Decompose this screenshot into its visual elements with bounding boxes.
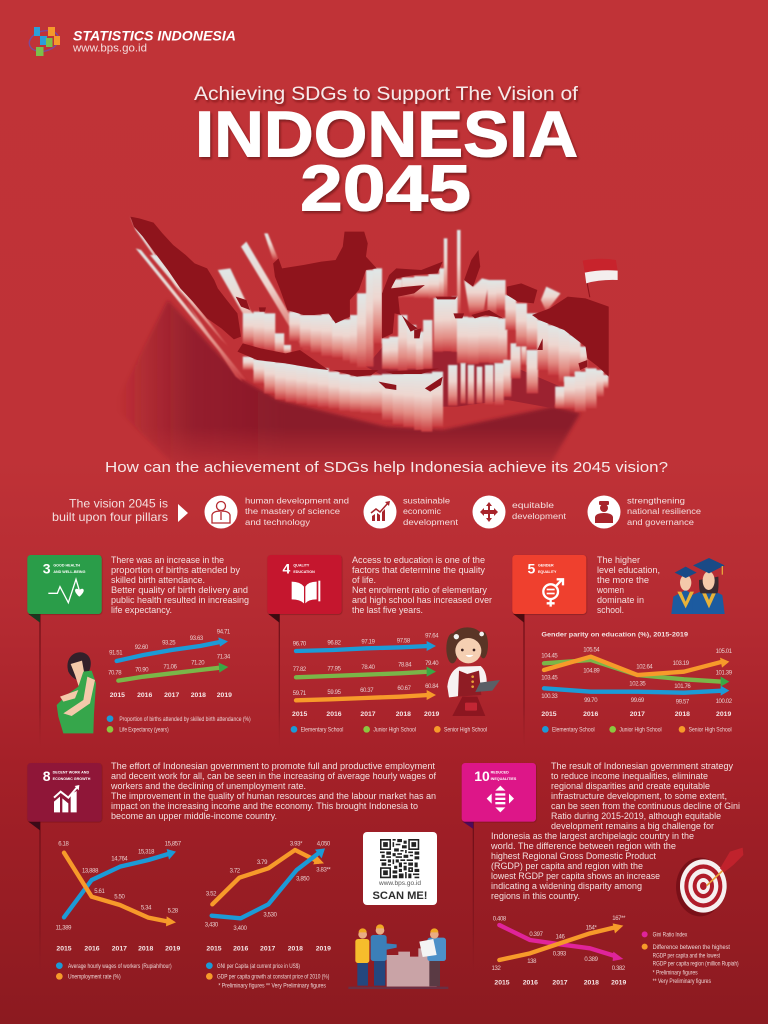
legend: wages [56,962,172,981]
SDG 8 text: become an upper middle-income country. [111,811,277,821]
line chart: wages and unemployment: 5.34 [141,905,152,911]
line chart: gender parity: 105.54 [583,648,600,654]
line chart: gender parity: 100.33 [541,694,558,700]
line chart: wages and unemployment: 5.28 [168,908,179,914]
pillars lead text: built upon four pillars [52,510,168,524]
icon: Indonesian flag [583,259,618,297]
line chart: GNI and GDP per capita: 3.72 [230,869,241,875]
QR code card: SCAN ME! [372,890,428,902]
pillar 1: and technology [245,517,311,527]
line chart: GNI and GDP per capita: 3,850 [296,877,310,883]
line chart: Gini and RGDP difference: 138 [527,959,537,965]
SDG 10 text: (RGDP) per capita and region with the [491,861,643,871]
line chart: wages and unemployment: 15,857 [165,841,182,847]
line chart: wages and unemployment: 6.18 [58,842,69,848]
legend: SDG 4: Junior High School [373,727,416,734]
line chart: enrolment ratio: 78.84 [398,663,412,669]
SDG 5 text: the more the [597,575,649,585]
line chart: GNI and GDP per capita: 2015 [206,946,222,953]
line chart: births and life expectancy: 2016 [137,692,152,699]
line chart: wages and unemployment: 2015 [56,946,72,953]
legend: GNI and GDP: GNI per Capita (at current price in US$) [217,963,300,970]
SDG 8 text: and decent work for all, can be seen in the increasing of average hourly wages of [111,771,436,781]
line chart: gender parity: 2016 [583,711,598,718]
line chart: gender parity: 99.70 [584,698,598,704]
line chart: GNI and GDP per capita: 2019 [316,946,331,953]
line chart: gender parity: 103.19 [673,661,690,667]
logo: Statistics Indonesia [27,27,61,56]
SDG 4 text: Access to education is one of the [352,555,485,565]
QR code card: www.bps.go.id [378,880,421,887]
SDG 10 text: regions in this country. [491,891,580,901]
line chart: Gini and RGDP difference: 0.408 [493,917,507,923]
agency name: www.bps.go.id [72,42,147,54]
QR code card [363,832,437,905]
SDG 5 text: dominate in [597,595,644,605]
legend: SDG 3: Life Expectancy (years) [119,727,169,734]
line chart: GNI and GDP per capita: 3.83** [316,868,331,874]
SDG 8 text: The effort of Indonesian government to promote full and productive employment [111,761,435,771]
SDG 4 card: EDUCATION [293,570,315,574]
legend: SDG 3: Proportion of births attended by skilled birth attendance (%) [119,716,251,723]
SDG 8 card: ECONOMIC GROWTH [53,777,91,781]
line chart: enrolment ratio: 77.95 [327,666,342,672]
SDG 4 text: of life. [352,575,376,585]
line chart: enrolment ratio: 2017 [360,711,376,718]
pillar 4: strengthening [627,496,685,506]
icon: school girl [446,627,500,716]
title: INDONESIA [195,98,578,170]
SDG 10 text: regional disparities and create equitable [551,781,710,791]
line chart: births and life expectancy: 2018 [191,692,206,699]
SDG 10 text: indicating a widening disparity among [491,881,642,891]
line chart: births and life expectancy: 2015 [110,692,125,699]
SDG 10 card: REDUCED [491,771,509,775]
legend: SDG 10: RGDP per capita and the lowest [653,952,720,959]
SDG 3 text: life expectancy. [111,605,172,615]
line chart: enrolment ratio: 2015 [292,711,307,718]
title [194,83,579,224]
line chart: wages and unemployment: 14,764 [111,857,128,863]
line chart: Gini and RGDP difference [492,916,626,987]
line chart: GNI and GDP per capita: 4,050 [317,842,331,848]
legend: SDG 10: RGDP per capita region (million Rupiah) [653,961,739,968]
SDG 5 text: The higher [597,555,640,565]
legend: SDG 10: Gini Ratio Index [653,932,688,939]
SDG 10 card: INEQUALITIES [491,777,517,781]
SDG 5 card: EQUALITY [538,570,557,574]
line chart: gender parity: 101.76 [674,684,691,690]
line chart: wages and unemployment [55,841,182,953]
SDG 10 text: to reduce income inequalities, eliminate [551,771,708,781]
pillar 1: human development and [245,496,349,506]
line chart: gender parity: 104.45 [541,653,558,659]
line chart: wages and unemployment: 2019 [165,946,180,953]
SDG 4 text: Net enrolment ratio of elementary [352,585,487,595]
pillar 2: economic [403,506,442,516]
line chart: Gini and RGDP difference: 167** [612,916,626,922]
legend: wages: Average hourly wages of workers (Rupiah/hour) [68,963,172,970]
SDG 10 text: can be seen from the continuous decline of Gini [551,801,740,811]
line chart: enrolment ratio: 96.70 [293,642,307,648]
SDG 8 text: The improvement in the quality of human resources and the labour market has an [111,791,436,801]
legend: GNI and GDP [206,962,329,990]
SDG 10 card: 10 [474,768,490,784]
line chart: gender parity: 104.89 [583,669,600,675]
line chart: enrolment ratio: 77.82 [293,667,307,673]
icon: target and dart [676,848,743,916]
SDG 3 text: There was an increase in the [111,555,224,565]
line chart: enrolment ratio: 2018 [396,711,411,718]
line chart: births and life expectancy: 71.20 [191,661,205,667]
pillar 4: and governance [627,517,694,527]
pillars lead text [52,496,168,524]
SDG 8 text [110,761,436,821]
legend: wages: Unemployment rate (%) [68,974,121,981]
line chart: Gini and RGDP difference: 146 [556,934,565,940]
SDG 4 text: the last five years. [352,605,423,615]
SDG 3 text: skilled birth attendance. [111,575,205,585]
legend: SDG 10: * Preliminary figures [653,969,698,976]
SDG 5 card: 5 [527,561,535,577]
line chart: enrolment ratio: 59.95 [327,690,342,696]
legend: SDG 4: Elementary School [301,727,344,734]
pillar 2: development [403,517,459,527]
SDG 8 card: DECENT WORK AND [53,771,89,775]
panel: SDG 3 health [27,555,251,747]
SDG 3 card: AND WELL-BEING [53,570,86,574]
legend: SDG 4 [291,726,487,734]
line chart: births and life expectancy: 94.71 [217,629,231,635]
SDG 3 text: Better quality of birth delivery and [111,585,248,595]
SDG 10 text: world. The difference between region with the [490,841,676,851]
SDG 10 text [490,761,740,901]
SDG 8 card: 8 [43,768,51,784]
line chart: births and life expectancy: 93.25 [162,641,176,647]
line chart: enrolment ratio: 2019 [424,711,439,718]
legend: SDG 5 [542,726,732,734]
line chart: gender parity: 2019 [716,711,731,718]
pillars lead text: The vision 2045 is [69,496,168,510]
SDG 10 text: infrastructure development, to some extent, [551,791,727,801]
line chart: wages and unemployment: 11,389 [55,926,72,932]
line chart: gender parity: 105.01 [716,649,733,655]
legend: GNI and GDP: * Preliminary figures ** Very Preliminary figures [218,983,327,990]
line chart: GNI and GDP per capita: 3.79 [257,860,268,866]
pillar 4: national resilience [627,506,701,516]
pillar 1: the mastery of science [245,506,340,516]
SDG 3 text: public health resulted in increasing [111,595,249,605]
legend: SDG 5: Senior High School [689,727,732,734]
line chart: Gini and RGDP difference: 0.389 [584,957,599,963]
line chart: Gini and RGDP difference: 2019 [611,980,626,987]
line chart: gender parity: 102.64 [636,665,653,671]
line chart: births and life expectancy [108,629,232,699]
SDG 5 card [512,555,586,747]
line chart: Gini and RGDP difference: 0.382 [612,966,626,972]
line chart: enrolment ratio: 60.84 [425,684,439,690]
line chart: births and life expectancy: 92.60 [135,645,149,651]
SDG 3 card: GOOD HEALTH [53,564,80,568]
legend: SDG 5: Elementary School [552,727,595,734]
line chart: births and life expectancy: 93.63 [190,636,204,642]
arrow [178,504,188,522]
line chart: gender parity: 101.39 [716,670,733,676]
pillar 2 [364,496,459,528]
line chart: gender parity: 102.35 [629,682,646,688]
line chart: gender parity: 103.45 [541,675,558,681]
line chart: GNI and GDP per capita: 3,530 [263,912,278,918]
line chart: births and life expectancy: 91.51 [109,651,123,657]
line chart: gender parity: 99.69 [631,698,645,704]
SDG 10 card [462,763,536,982]
line chart: enrolment ratio: 97.19 [361,639,376,645]
SDG 4 card: QUALITY [293,564,310,568]
panel: SDG 8 decent work [27,761,448,990]
pillar 2: sustainable [403,496,450,506]
SDG 8 text: workers and the declining of unemployment rate. [110,781,306,791]
line chart: enrolment ratio: 97.64 [425,633,439,639]
legend: SDG 3 [107,715,251,734]
legend: SDG 5: Junior High School [619,727,662,734]
line chart: Gini and RGDP difference: 2016 [523,980,538,987]
line chart: enrolment ratio: 79.40 [425,661,439,667]
agency name [72,28,236,54]
SDG 10 text: highest Regional Gross Domestic Product [491,851,656,861]
line chart: births and life expectancy: 2017 [164,692,179,699]
SDG 4 card: 4 [282,561,290,577]
line chart: GNI and GDP per capita: 3,400 [233,926,248,932]
line chart: Gini and RGDP difference: 0.393 [553,951,567,957]
line chart: Gini and RGDP difference: 2018 [584,980,599,987]
SDG 5 text [596,555,660,615]
line chart: wages and unemployment: 2017 [112,946,127,953]
agency name: STATISTICS INDONESIA [73,28,236,44]
line chart: wages and unemployment: 13,888 [82,869,99,875]
SDG 5 text: women [596,585,624,595]
line chart: Gini and RGDP difference: 154* [586,926,597,932]
SDG 3 card [27,555,102,747]
line chart: GNI and GDP per capita: 2017 [260,946,275,953]
line chart: births and life expectancy: 71.34 [217,654,231,660]
line chart: GNI and GDP per capita: 2016 [233,946,248,953]
map of Indonesia [114,217,618,483]
line chart: enrolment ratio: 2016 [326,711,342,718]
line chart: gender parity: 2015 [541,711,557,718]
icon: pregnant woman [57,652,96,733]
legend: SDG 10: Difference between the highest [653,944,730,951]
line chart: wages and unemployment: 5.61 [94,889,105,895]
SDG 5 card: GENDER [538,564,554,568]
line chart: enrolment ratio: 59.71 [293,691,307,697]
line chart: wages and unemployment: 2018 [138,946,153,953]
pillar 1 [204,496,349,528]
line chart: GNI and GDP per capita: 3,430 [205,922,219,928]
line chart: wages and unemployment: 2016 [84,946,100,953]
pillar 3: development [512,511,567,521]
SDG 8 card [27,763,102,982]
title: 2045 [300,152,471,224]
SDG 4 text: and high school has increased over [352,595,492,605]
SDG 8 text: impact on the increasing income and the economy. This brought Indonesia to [111,801,418,811]
SDG 10 text: Ratio during 2015-2019, although equitable [551,811,721,821]
SDG 3 text [111,555,249,615]
line chart: gender parity: 99.57 [676,700,690,706]
SDG 5 text: school. [597,605,624,615]
line chart: Gini and RGDP difference: 0.397 [529,932,544,938]
legend: SDG 10: ** Very Preliminary figures [653,978,711,985]
SDG 3 card: 3 [43,561,51,577]
title: Achieving SDGs to Support The Vision of [194,83,579,105]
SDG 10 text: lowest RGDP per capita shows an increase [491,871,660,881]
legend: GNI and GDP: GDP per capita growth at constant price of 2010 (%) [217,974,329,981]
line chart: GNI and GDP per capita [205,841,331,953]
SDG 5 text: level education, [597,565,660,575]
line chart: GNI and GDP per capita: 2018 [288,946,303,953]
line chart: gender parity: 2017 [630,711,645,718]
line chart: gender parity: 2018 [675,711,690,718]
SDG 4 card [267,555,342,747]
line chart: wages and unemployment: 15,318 [138,849,155,855]
line chart: wages and unemployment: 5.50 [114,895,125,901]
line chart: enrolment ratio: 97.58 [397,639,411,645]
line chart: gender parity: 100.02 [716,699,733,705]
line chart: births and life expectancy: 71.06 [163,665,178,671]
line chart: Gini and RGDP difference: 2017 [552,980,568,987]
question heading: How can the achievement of SDGs help Indonesia achieve its 2045 vision? [105,459,668,476]
line chart: enrolment ratio: 60.37 [360,688,374,694]
line chart: gender parity: Gender parity on education (%), 2015-2019 [541,632,688,639]
SDG 3 text: proportion of births attended by [111,565,241,575]
icon: graduates [671,558,725,614]
line chart: gender parity [541,632,733,718]
line chart: enrolment ratio: 60.67 [397,686,412,692]
pillar 4 [588,496,701,528]
SDG 10 text: development remains a big challenge for [551,821,714,831]
SDG 4 text: factors that determine the quality [352,565,486,575]
line chart: enrolment ratio: 96.82 [327,640,342,646]
four pillars row [52,496,701,528]
pillar 3 [472,496,567,528]
SDG 10 text: The result of Indonesian government strategy [551,761,733,771]
line chart: births and life expectancy: 70.90 [135,668,149,674]
SDG 10 text: Indonesia as the largest archipelagic country in the [491,831,694,841]
legend: SDG 10 [642,931,739,985]
SDG 4 text [352,555,492,615]
pillar 3: equitable [512,500,554,510]
legend: SDG 4: Senior High School [444,727,487,734]
panel: SDG 10 reduced inequalities [462,761,743,987]
line chart: enrolment ratio [292,633,439,718]
line chart: enrolment ratio: 78.40 [361,665,376,671]
line chart: Gini and RGDP difference: 2015 [494,980,510,987]
icon: construction workers [348,924,448,989]
line chart: births and life expectancy: 2019 [217,692,232,699]
line chart: GNI and GDP per capita: 3.93* [290,841,303,847]
line chart: births and life expectancy: 70.78 [108,671,122,677]
panel: SDG 4 education [267,555,500,747]
line chart: GNI and GDP per capita: 3.52 [206,892,217,898]
line chart: Gini and RGDP difference: 132 [492,966,501,972]
panel: SDG 5 gender [512,555,733,747]
